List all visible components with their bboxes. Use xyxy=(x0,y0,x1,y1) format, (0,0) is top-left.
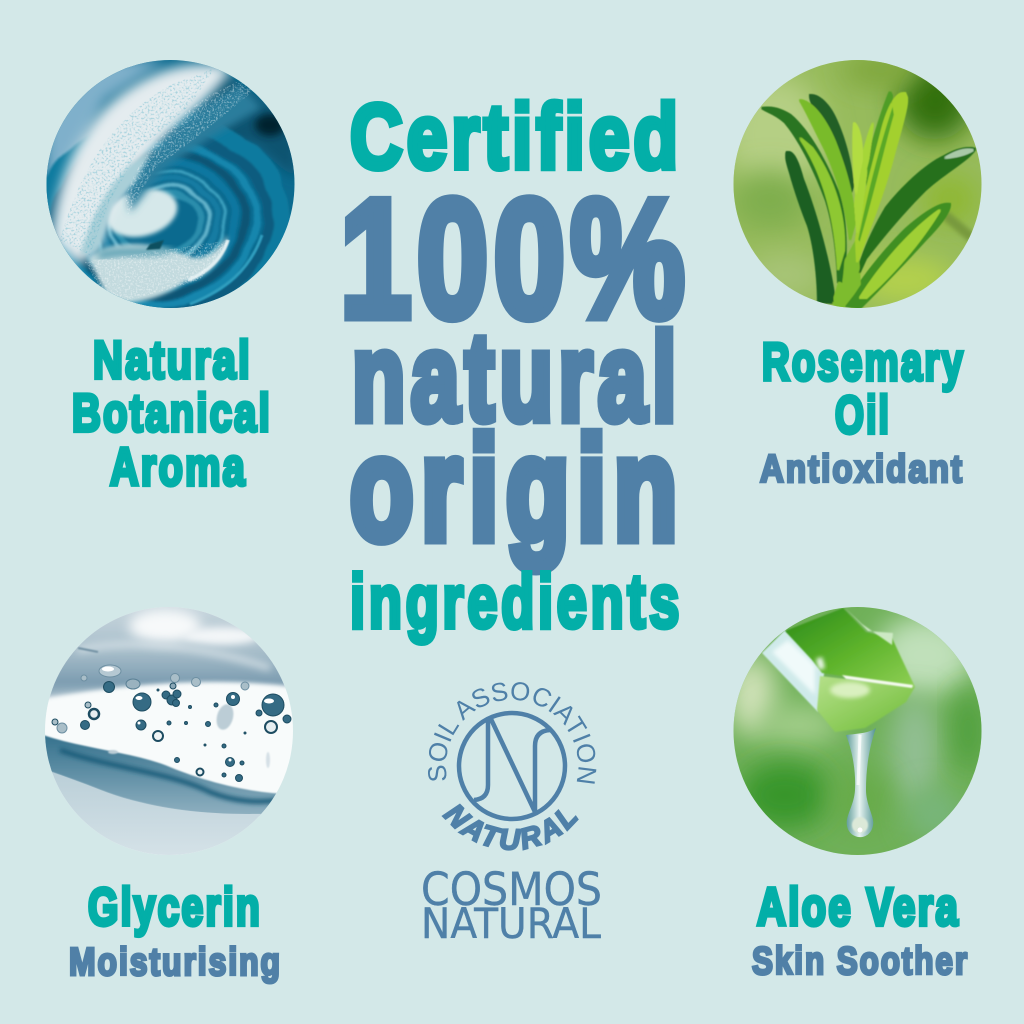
logo wordmark: COSMOS: COSMOS xyxy=(421,863,602,916)
gel drop xyxy=(846,728,876,837)
bubbles xyxy=(52,665,291,782)
rosemary leaves xyxy=(762,92,975,308)
heading: Certified: Certified xyxy=(350,86,682,188)
leaf F xyxy=(856,93,907,262)
leaf E xyxy=(866,92,892,195)
label: Rosemary Oil Antioxidant: Antioxidant xyxy=(760,448,964,491)
leaf G xyxy=(855,148,975,282)
photo: rosemary xyxy=(725,52,986,312)
leaf B xyxy=(762,107,846,285)
label: Natural Botanical Aroma xyxy=(72,331,272,497)
lower gel band xyxy=(45,734,276,816)
label: Glycerin Moisturising xyxy=(69,878,282,984)
heading: natural: natural xyxy=(352,309,682,447)
heading: 100%: 100% xyxy=(340,164,690,352)
label: Rosemary Oil Antioxidant xyxy=(760,333,965,491)
logo ring xyxy=(459,713,565,819)
leaf H xyxy=(846,204,950,308)
logo N mark xyxy=(474,717,550,812)
label: Natural Botanical Aroma: Natural xyxy=(93,331,252,390)
leaf top xyxy=(785,608,915,687)
heading: origin: origin xyxy=(350,407,685,570)
logo: Soil Association Cosmos Natural xyxy=(421,682,602,948)
label: Natural Botanical Aroma: Botanical xyxy=(72,384,272,443)
heading: ingredients: ingredients xyxy=(350,560,683,644)
label: Rosemary Oil Antioxidant: Oil xyxy=(835,386,891,445)
small central leaves xyxy=(853,123,862,208)
logo arc text: natural: NATURAL xyxy=(442,804,579,851)
cut face xyxy=(817,676,915,732)
photo: ocean wave xyxy=(46,60,294,308)
label: Glycerin Moisturising: Moisturising xyxy=(69,941,282,984)
label: Natural Botanical Aroma: Aroma xyxy=(110,438,247,497)
leaf A xyxy=(786,152,835,303)
label: Aloe Vera Skin Soother: Skin Soother xyxy=(752,940,969,983)
label: Aloe Vera Skin Soother: Aloe Vera xyxy=(757,878,960,937)
leaf D xyxy=(810,95,853,195)
logo arc text: soil association: SOIL ASSOCIATION xyxy=(428,682,596,784)
label: Aloe Vera Skin Soother xyxy=(752,878,969,983)
stem xyxy=(833,240,860,308)
logo wordmark: NATURAL: NATURAL xyxy=(421,899,602,948)
leaf C xyxy=(800,100,855,240)
photo: glycerin gel xyxy=(45,607,293,855)
foam speckle xyxy=(85,78,252,306)
label: Glycerin Moisturising: Glycerin xyxy=(88,878,262,937)
photo: aloe vera xyxy=(728,600,986,856)
leaf rind xyxy=(762,630,825,712)
